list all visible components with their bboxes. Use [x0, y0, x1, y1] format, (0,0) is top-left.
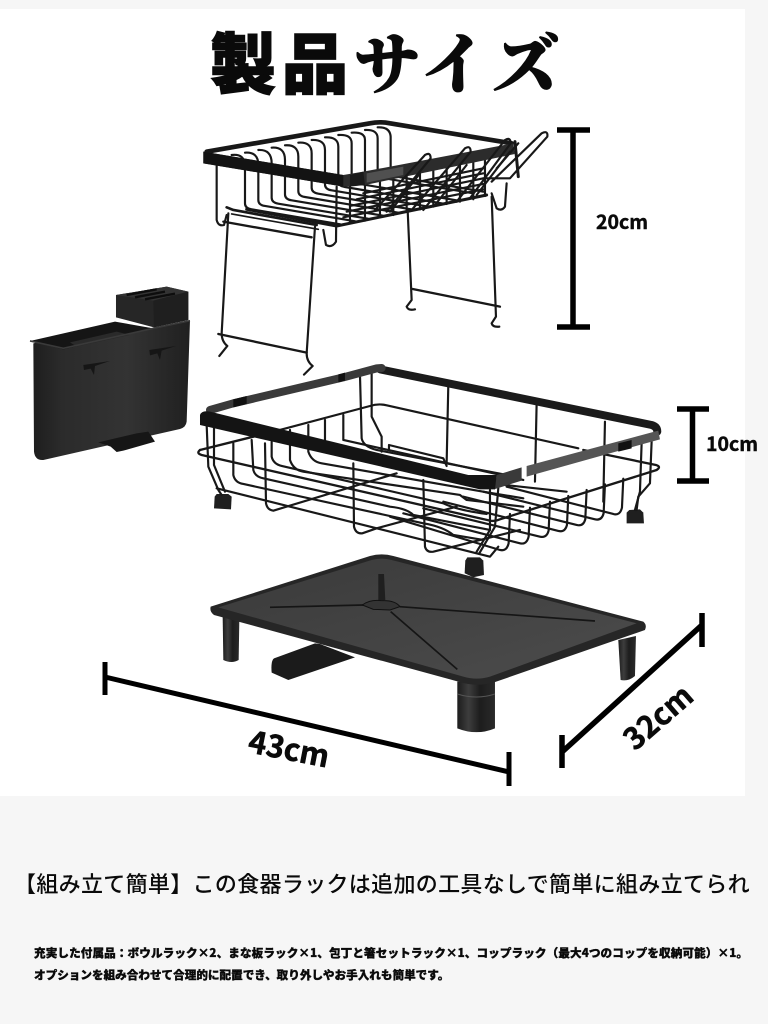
- accessories description: 充実した付属品：ボウルラック×2、まな板ラック×1、包丁と箸セットラック×1、コップラック（最大4つのコップを収納可能）×1。: [34, 945, 748, 961]
- options description: オプションを組み合わせて合理的に配置でき、取り外しやお手入れも簡単です。: [34, 967, 449, 983]
- tray plate: [210, 554, 646, 685]
- assembly headline: 【組み立て簡単】この食器ラックは追加の工具なしで簡単に組み立てられ: [14, 867, 750, 899]
- dimension: height 10cm: [677, 409, 758, 481]
- rack legs: [218, 197, 500, 375]
- caddy hooks: [83, 346, 176, 452]
- bowl wire rack: [198, 368, 660, 577]
- label: 43cm: 43cm: [245, 718, 334, 776]
- rack plate ribs: [217, 127, 507, 246]
- label: 10cm: 10cm: [706, 428, 758, 457]
- utensil caddy: [30, 287, 190, 460]
- drip tray: [210, 554, 646, 732]
- title: 製品サイズ: [210, 12, 565, 108]
- dimension: depth 32cm: [562, 613, 702, 768]
- knife block: [116, 287, 188, 327]
- tray bracket: [271, 643, 355, 680]
- bowl rack feet: [214, 494, 644, 577]
- tray legs: [223, 617, 636, 732]
- dimension: width 43cm: [105, 662, 509, 786]
- dimension: height 20cm: [557, 130, 648, 327]
- label: 32cm: 32cm: [612, 673, 701, 758]
- caddy body: [30, 321, 190, 460]
- rack rim: [203, 122, 518, 187]
- bowl rack rim: [200, 368, 660, 489]
- white product panel: [0, 9, 745, 796]
- rack slanted plate holders: [375, 132, 547, 212]
- label: 20cm: 20cm: [596, 206, 648, 235]
- top dish rack: [203, 122, 547, 375]
- bowl rack wires: [198, 373, 659, 557]
